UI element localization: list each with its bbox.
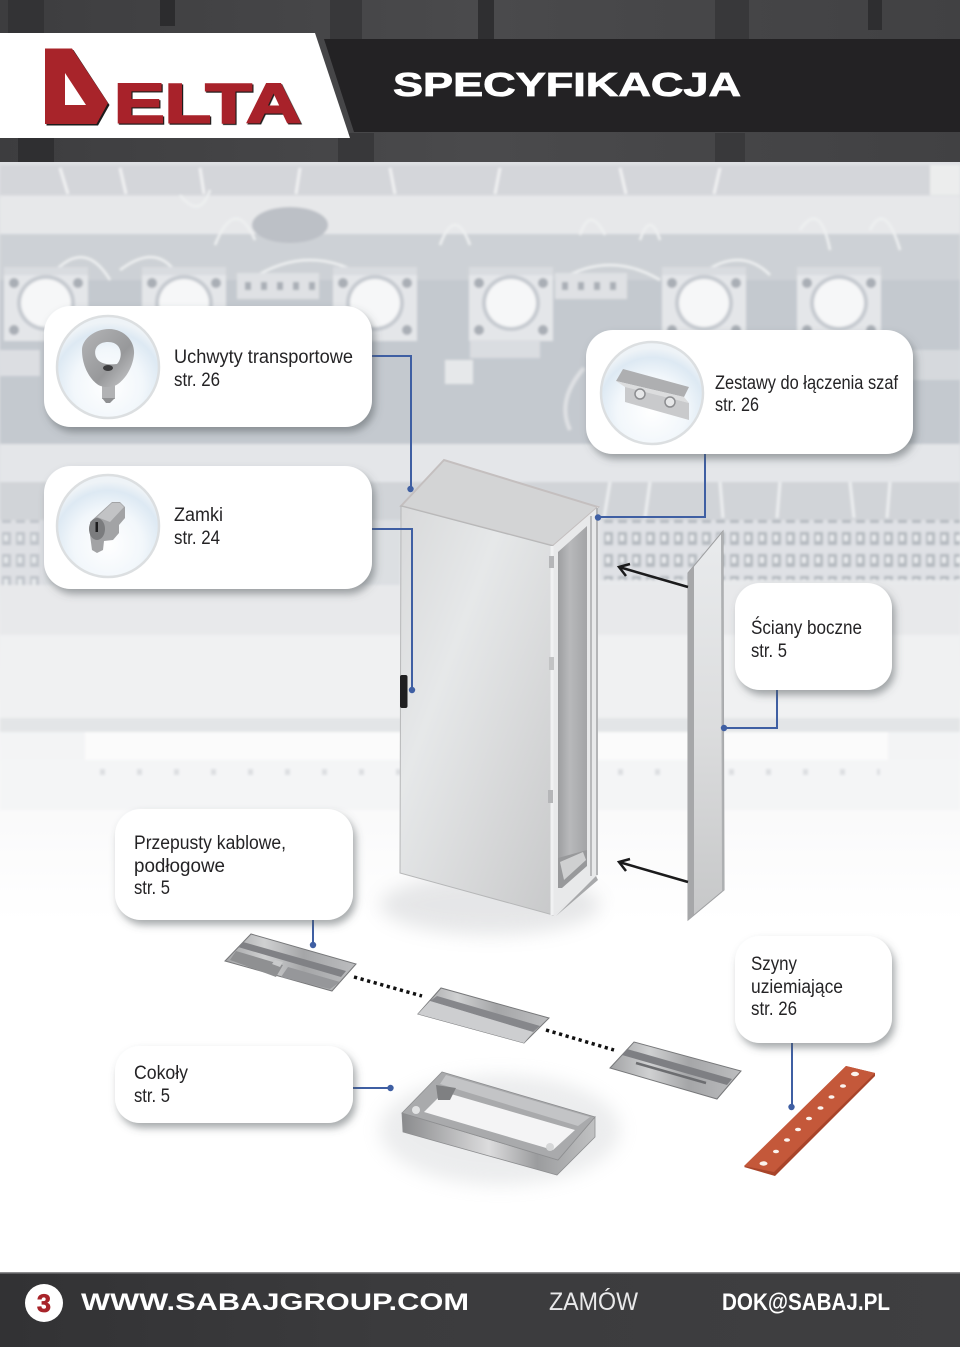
connector: rails [788, 1043, 795, 1110]
cabinet right side open frame [553, 507, 598, 915]
text: transport handles: Uchwyty transportowe [174, 347, 353, 368]
header band [0, 0, 960, 162]
text: plinths [134, 1063, 188, 1107]
text: grounding rails: str. 26 [751, 999, 797, 1020]
panel: transport handles [44, 306, 372, 427]
icon: lock cylinder [57, 475, 159, 577]
text: cable glands: Przepusty kablowe, [134, 833, 286, 854]
text: plinths: str. 5 [134, 1086, 170, 1107]
footer band [0, 1272, 960, 1347]
plinth base [380, 1072, 620, 1185]
text: joining kits: str. 26 [715, 395, 759, 416]
title bar [324, 39, 960, 132]
text: plinths: Cokoły [134, 1063, 188, 1084]
panel: side walls [735, 583, 892, 690]
connector: joining kits [595, 454, 705, 521]
logo panel [0, 33, 350, 138]
text: joining kits: Zestawy do łączenia szaf [715, 373, 899, 394]
connector: transport handles [372, 356, 414, 492]
copper grounding rail [744, 1066, 875, 1176]
cabinet door [400, 506, 553, 915]
email: DOK@SABAJ.PL [722, 1289, 890, 1316]
plinth cover plate 3 [610, 1042, 741, 1099]
page number badge [25, 1284, 63, 1322]
text: grounding rails: uziemiające [751, 977, 843, 998]
door handle [400, 675, 408, 708]
website: WWW.SABAJGROUP.COM [81, 1289, 469, 1316]
text: locks: Zamki [174, 505, 223, 526]
text: joining kits [715, 373, 899, 416]
connector: cable glands [310, 920, 316, 948]
text: side walls: str. 5 [751, 641, 787, 662]
panel: grounding rails [735, 936, 892, 1043]
dotted line between plates [354, 977, 614, 1050]
arrow: lower side wall [619, 859, 688, 882]
text: side walls: Ściany boczne [751, 617, 862, 639]
side wall panel [688, 531, 724, 920]
text: locks: str. 24 [174, 528, 220, 549]
logo: delta D mark [45, 48, 110, 126]
text: cable glands: str. 5 [134, 878, 170, 899]
plinth cover plate 1 [225, 934, 356, 991]
plinth cover plate 2 [418, 988, 549, 1043]
cabinet top [401, 460, 598, 546]
text: cable glands: podłogowe [134, 856, 225, 877]
title: SPECYFIKACJA [393, 66, 741, 103]
page number badge: 3 [37, 1290, 51, 1318]
panel: cable glands [115, 809, 353, 920]
text: transport handles [174, 347, 353, 391]
text: transport handles: str. 26 [174, 370, 220, 391]
panel: locks [44, 466, 372, 589]
text: grounding rails: Szyny [751, 954, 797, 975]
panel: joining kits [586, 330, 913, 454]
text: side walls [751, 617, 862, 662]
arrow: upper side wall [619, 564, 688, 587]
text: grounding rails [751, 954, 843, 1020]
connector: plinths [353, 1085, 394, 1091]
icon: joining bracket [601, 342, 703, 444]
logo wordmark: ELTA [114, 72, 301, 134]
cabinet [380, 460, 600, 935]
icon: lifting eye bolt [57, 316, 159, 418]
panel: plinths [115, 1046, 353, 1123]
connector: side walls [721, 690, 777, 731]
text: locks [174, 505, 223, 549]
text: cable glands [134, 833, 286, 899]
order label: ZAMÓW [549, 1287, 638, 1316]
connector: locks [372, 529, 415, 693]
